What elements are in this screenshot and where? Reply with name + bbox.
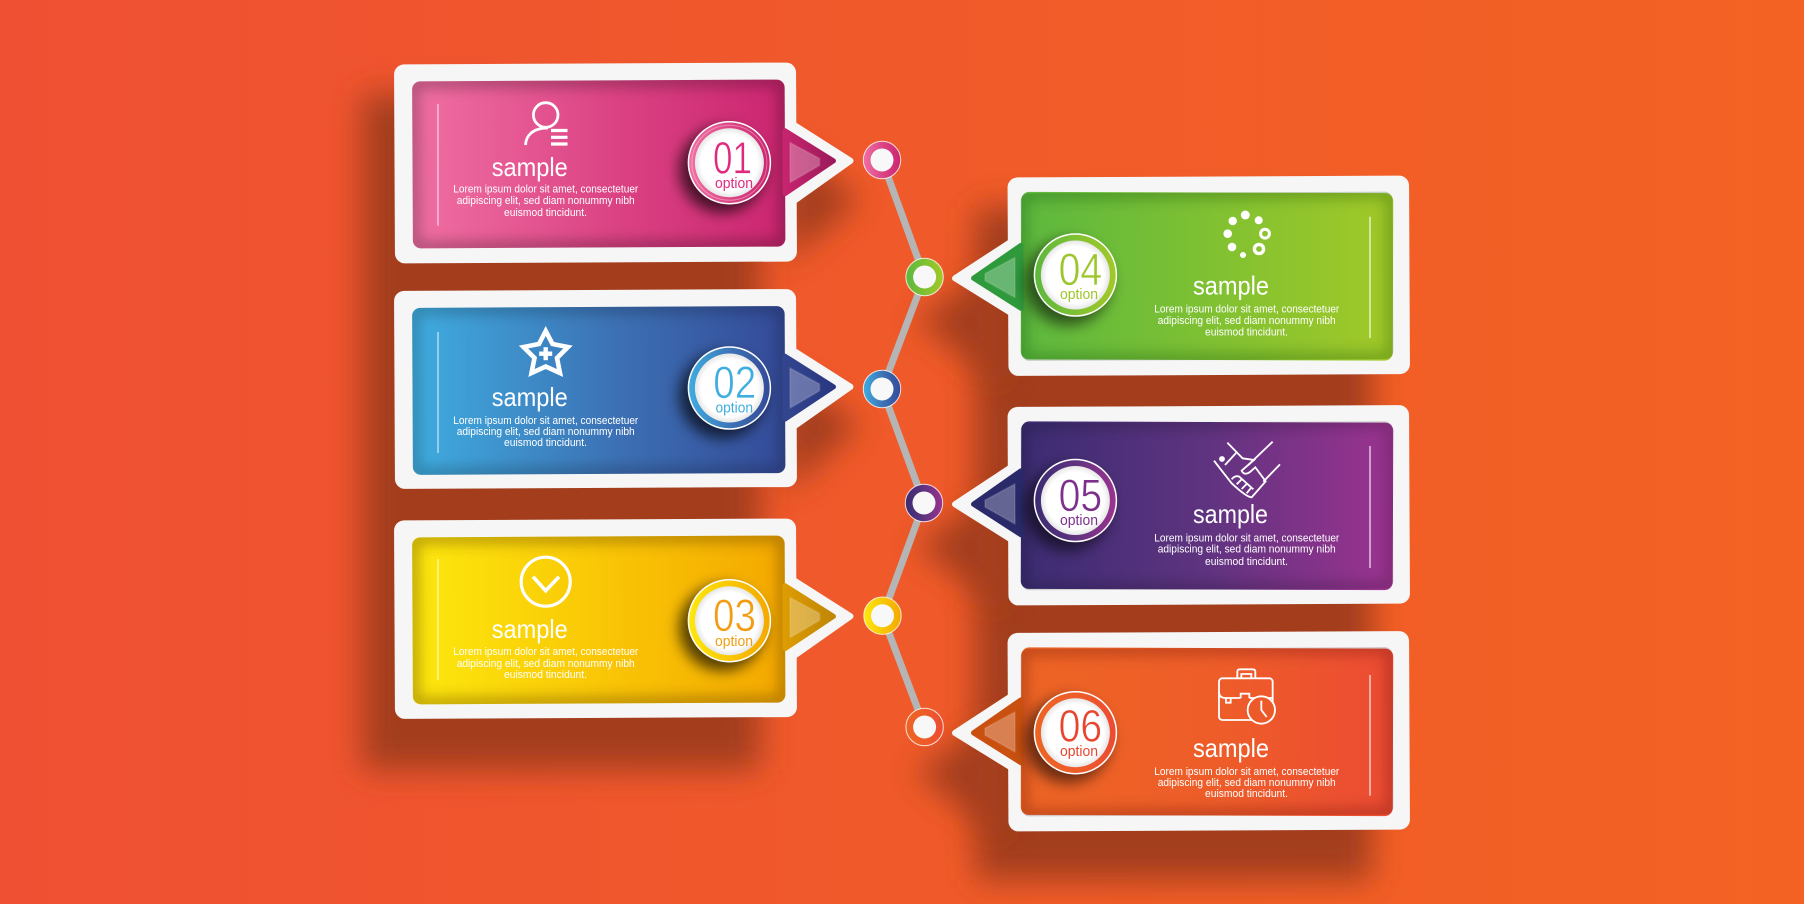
number badge: option [716, 400, 753, 417]
description [1154, 304, 1340, 339]
timeline node 3 [864, 597, 901, 634]
number badge: 03 [713, 590, 756, 641]
timeline node 2 [863, 370, 901, 408]
description: euismod tincidunt. [1205, 556, 1288, 568]
description: adipiscing elit, sed diam nonummy nibh [457, 658, 635, 670]
description [1154, 533, 1340, 568]
icon: briefcase with clock [1219, 669, 1275, 724]
description: Lorem ipsum dolor sit amet, consectetuer [453, 646, 639, 658]
vertical rule [437, 104, 439, 226]
description: euismod tincidunt. [504, 669, 587, 681]
timeline node 6 [906, 708, 943, 746]
number badge [1025, 234, 1116, 326]
panel: card 05 [955, 405, 1410, 606]
number badge: option [1060, 743, 1098, 760]
number badge: option [715, 175, 753, 192]
heading: sample [1193, 270, 1269, 300]
panel: card 01 [394, 62, 851, 263]
number badge: 01 [713, 132, 752, 183]
vertical rule [437, 559, 439, 680]
vertical rule [437, 332, 439, 453]
icon: loading dots [1223, 210, 1269, 258]
number badge [679, 347, 770, 438]
number badge: option [715, 633, 753, 650]
description: adipiscing elit, sed diam nonummy nibh [457, 195, 635, 207]
card frame [955, 405, 1410, 606]
vertical rule [1369, 675, 1371, 796]
description: Lorem ipsum dolor sit amet, consectetuer [1154, 766, 1340, 778]
number badge: 02 [713, 357, 756, 408]
timeline node 1 [863, 141, 901, 179]
number badge [1025, 460, 1116, 551]
card frame [955, 631, 1410, 832]
description: adipiscing elit, sed diam nonummy nibh [1158, 777, 1336, 789]
description: Lorem ipsum dolor sit amet, consectetuer [453, 415, 639, 427]
description: Lorem ipsum dolor sit amet, consectetuer [1154, 533, 1340, 545]
number badge: 04 [1059, 244, 1102, 295]
panel: card 03 [394, 518, 851, 719]
card frame [394, 289, 851, 489]
icon: handshake [1214, 442, 1280, 497]
panel: card 06 [955, 631, 1410, 832]
panel: card 02 [394, 289, 851, 489]
description: euismod tincidunt. [504, 437, 587, 449]
timeline connector [882, 160, 925, 727]
description: Lorem ipsum dolor sit amet, consectetuer [1154, 304, 1340, 316]
icon: chevron circle [521, 557, 570, 606]
timeline node 5 [905, 484, 943, 522]
card frame [955, 176, 1410, 376]
heading: sample [1193, 499, 1268, 529]
description [453, 415, 639, 449]
description: adipiscing elit, sed diam nonummy nibh [457, 426, 635, 438]
number badge: option [1060, 512, 1098, 529]
icon: star with plus [524, 331, 568, 373]
timeline node 4 [906, 258, 943, 296]
description: euismod tincidunt. [1205, 788, 1288, 800]
number badge [679, 122, 770, 213]
icon: user list [526, 103, 568, 145]
heading: sample [492, 614, 568, 644]
card frame [394, 518, 851, 719]
panel: card 04 [955, 176, 1410, 376]
vertical rule [1369, 446, 1371, 568]
description [453, 646, 639, 681]
heading: sample [1193, 733, 1269, 763]
description: euismod tincidunt. [1205, 327, 1288, 339]
description [1154, 766, 1340, 800]
number badge: 05 [1059, 470, 1102, 521]
description: adipiscing elit, sed diam nonummy nibh [1158, 544, 1336, 556]
description: euismod tincidunt. [504, 207, 587, 219]
card frame [394, 62, 851, 263]
heading: sample [492, 382, 568, 412]
description: Lorem ipsum dolor sit amet, consectetuer [453, 184, 639, 196]
heading: sample [492, 152, 568, 182]
vertical rule [1369, 217, 1371, 338]
number badge [1025, 692, 1116, 783]
number badge: 06 [1059, 700, 1102, 752]
number badge: option [1060, 286, 1098, 303]
description: adipiscing elit, sed diam nonummy nibh [1158, 315, 1336, 327]
number badge [679, 580, 770, 671]
description [453, 184, 639, 219]
drop shadows [362, 95, 1372, 880]
